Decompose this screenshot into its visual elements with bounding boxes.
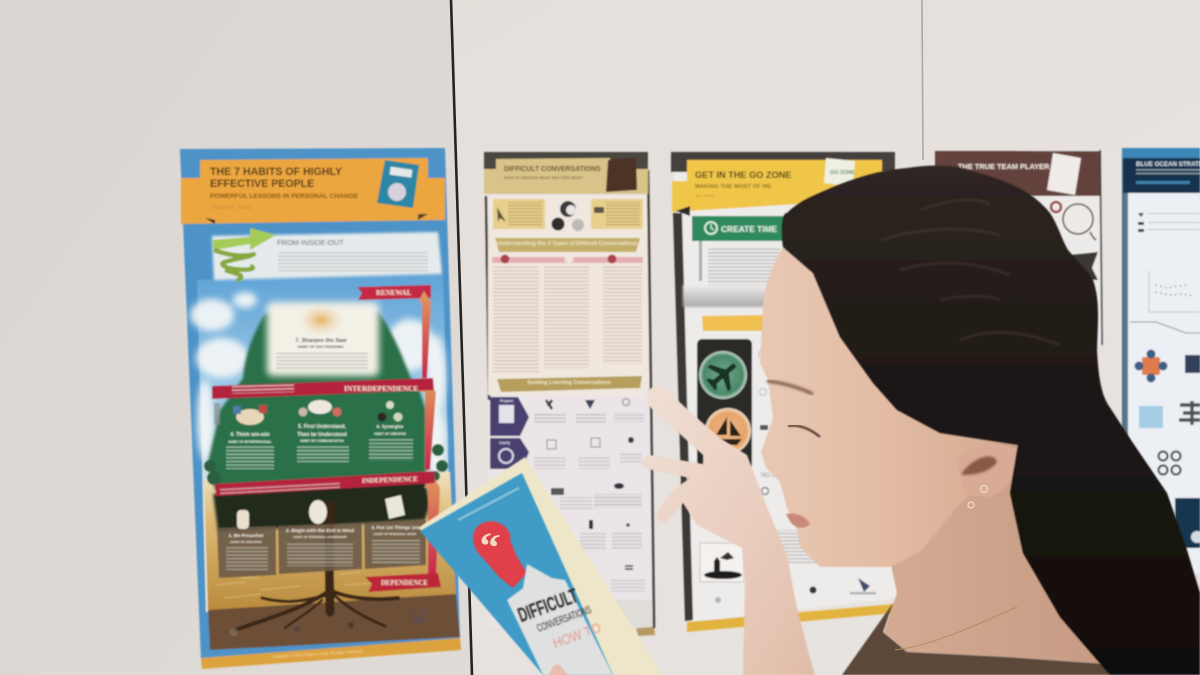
header ribbon: MAKING THE MOST OF ME <box>695 184 771 190</box>
hand shape <box>642 387 815 675</box>
ribbon: guiding learning conversations: Guiding Learning Conversations <box>527 380 611 386</box>
book title: DIFFICULT <box>515 585 581 627</box>
header ribbon <box>672 158 895 216</box>
sand ground <box>204 472 456 612</box>
ribbon: interdependence <box>212 378 434 399</box>
three columns of text <box>493 266 642 374</box>
thumb on book <box>549 664 568 675</box>
habit 6: synergize <box>369 401 413 461</box>
ribbon: interdependence: INTERDEPENDENCE <box>344 384 418 393</box>
sticky book: GO ZONE <box>830 170 855 176</box>
cream upper section <box>488 196 647 395</box>
footer logos <box>230 610 426 636</box>
poster body <box>484 152 654 628</box>
lips <box>786 513 810 528</box>
book cover <box>1047 153 1081 195</box>
bottom gold strip <box>201 638 461 669</box>
header <box>1123 158 1200 193</box>
ribbon: understanding: Understanding the 3 Types of Difficult Conversations <box>496 241 638 247</box>
book: Difficult Conversations <box>418 457 663 675</box>
habit 3: put 1st things 1st: HABIT OF PERSONAL MGMT <box>374 532 417 536</box>
column headers <box>492 254 643 264</box>
poster: The True Team Player: THE TRUE TEAM PLAYER <box>958 162 1050 171</box>
create time button <box>692 216 786 241</box>
arrow: growth to independence <box>424 474 440 575</box>
poster: Blue Ocean Strategy <box>1122 148 1200 573</box>
habit 6: synergize: 6. Synergize <box>377 424 404 429</box>
clouds <box>190 292 446 474</box>
habit 5: first understand: HABIT OF COMMUNICATION <box>300 439 344 443</box>
icon: clock <box>705 222 717 234</box>
from inside-out panel <box>212 228 442 281</box>
ribbon: guiding learning conversations <box>497 376 642 392</box>
ribbon: independence <box>215 471 435 496</box>
ear <box>955 445 1019 497</box>
hand and forearm <box>642 387 815 675</box>
arrow: growth to renewal <box>418 291 431 378</box>
habit 3: put 1st things 1st: 3. Put 1st Things 1st <box>371 525 419 531</box>
circular note <box>1063 204 1096 240</box>
book title: CONVERSATIONS <box>535 604 593 635</box>
note box right <box>591 199 643 229</box>
sand texture <box>216 572 390 598</box>
right column text <box>758 350 818 564</box>
dark footer <box>1175 498 1200 548</box>
flag on summit picture <box>700 543 744 582</box>
habit 7 box <box>267 302 379 376</box>
poster: Difficult Conversations <box>484 152 655 636</box>
traffic light <box>697 339 752 469</box>
icon: people circle <box>1158 452 1180 474</box>
right column text: NO Z <box>761 473 776 479</box>
ribbon: dependence <box>365 573 441 592</box>
tree canopy upper <box>208 312 426 490</box>
quote marks: “ <box>475 522 503 570</box>
dark top band <box>484 152 648 170</box>
chart <box>1130 271 1200 333</box>
header ribbon: HOW TO DISCUSS WHAT MATTERS MOST <box>504 175 583 180</box>
step panel: prepare <box>490 397 529 436</box>
habit 5: first understand: Then be Understood <box>297 432 347 438</box>
shirt <box>842 603 1110 675</box>
habit 4: think win-win: HABIT OF INTERPERSONAL <box>228 440 272 444</box>
icon: blue map <box>1139 406 1163 428</box>
poster: The True Team Player <box>935 150 1102 345</box>
step panel: prepare: Prepare <box>500 399 513 403</box>
habit 2: begin with the end in mind: HABIT OF PERSONAL LEADERSHIP <box>293 535 347 539</box>
footer logos <box>715 578 876 603</box>
header ribbon: EFFECTIVE PEOPLE <box>210 178 314 190</box>
soil <box>208 594 460 650</box>
header ribbon <box>181 158 445 224</box>
ribbon: understanding <box>495 238 640 252</box>
sky background <box>197 274 452 612</box>
book cover <box>377 160 419 208</box>
icon: signpost <box>1179 401 1200 425</box>
habit 5: first understand: 5. First Understand, <box>298 424 346 430</box>
arrow: growth to interdependence <box>419 380 436 470</box>
face <box>760 247 1000 567</box>
subtitle: POWERFUL LESSONS IN PERSONAL CHANGE <box>210 193 359 200</box>
grey photo strip <box>683 285 785 307</box>
header ribbon: Bob Tiffany <box>696 194 715 198</box>
blue cover <box>420 473 613 675</box>
orange boat signal <box>705 408 751 454</box>
author: Stephen R. Covey <box>211 205 252 211</box>
step panel: clarify purpose <box>490 438 529 469</box>
book pages <box>418 457 663 675</box>
habit 4: think win-win: 4. Think win-win <box>230 432 270 438</box>
curled ring finger <box>683 468 715 495</box>
green plane signal <box>699 351 747 399</box>
person: woman reading <box>760 166 1200 675</box>
book title: HOW TO <box>551 619 603 651</box>
habit 5: first understand <box>297 400 349 462</box>
neck <box>850 420 1120 664</box>
dark star <box>1068 252 1098 280</box>
necklace <box>895 607 1017 650</box>
habits 4 to 6 <box>214 400 413 469</box>
ribbon: renewal: RENEWAL <box>376 289 412 297</box>
tree canopy lower <box>213 480 430 532</box>
habit 2: begin with the end in mind: 2. Begin with the End in Mind <box>286 528 354 534</box>
dark top band <box>671 152 895 172</box>
habit 1: be proactive: HABIT OF CREATION <box>230 540 262 544</box>
ribbon: dependence: DEPENDENCE <box>381 580 428 587</box>
header ribbon: GET IN THE GO ZONE <box>695 170 791 180</box>
from inside-out panel: FROM INSIDE-OUT <box>277 238 344 247</box>
red head <box>473 521 527 588</box>
habit 3: put 1st things 1st <box>364 495 426 569</box>
book title <box>515 581 603 659</box>
bottom gold strip: Copyright © 2016 Read to Lead. All rights reserved. <box>272 648 363 659</box>
yellow bar <box>702 315 765 331</box>
ribbon: independence: INDEPENDENCE <box>362 475 418 485</box>
ear shadow <box>962 456 997 475</box>
ribbon: renewal <box>357 285 431 300</box>
earrings <box>968 486 987 508</box>
header ribbon: DIFFICULT CONVERSATIONS <box>504 166 601 173</box>
habit 1: be proactive: 1. Be Proactive <box>228 533 264 539</box>
habit 1: be proactive <box>217 510 276 578</box>
habit 4: think win-win <box>214 403 274 469</box>
left dark strip <box>673 213 693 621</box>
create time button: CREATE TIME <box>721 224 778 234</box>
eye <box>788 426 820 437</box>
three heads icon <box>552 201 584 231</box>
poster body <box>671 152 897 622</box>
bottom gold strip <box>687 604 895 632</box>
eyebrow <box>767 381 813 394</box>
step panel: clarify purpose: Clarify <box>499 441 510 445</box>
cover top strip <box>458 488 519 520</box>
icon: cross of circles <box>1134 350 1168 382</box>
title: THE 7 HABITS OF HIGHLY <box>210 166 342 178</box>
white label <box>507 564 613 675</box>
text items <box>1138 213 1200 232</box>
tree roots and trunk <box>235 505 398 630</box>
sticky book <box>824 158 855 187</box>
hair highlights <box>880 200 1060 345</box>
side leaves <box>204 444 448 485</box>
header ribbon <box>484 157 648 194</box>
habit 6: synergize: HABIT OF CREATIVE <box>374 432 406 436</box>
icon: gears <box>1051 202 1061 212</box>
step icons and captions <box>534 398 645 592</box>
poster: The 7 Habits of Highly Effective People <box>180 148 461 669</box>
create time text <box>699 241 780 286</box>
habit 7 box: 7. Sharpen the Saw <box>295 338 347 344</box>
poster: Get in the Go Zone <box>671 152 897 632</box>
hair <box>782 166 1200 675</box>
habit 2: begin with the end in mind <box>278 500 362 574</box>
note box left <box>493 199 545 229</box>
habits 1 to 3 <box>217 495 426 578</box>
icon: dark grid <box>1185 355 1200 373</box>
habit 7 box: HABIT OF SELF-RENEWAL <box>298 345 345 349</box>
icon: green spiral arrow <box>212 228 276 281</box>
